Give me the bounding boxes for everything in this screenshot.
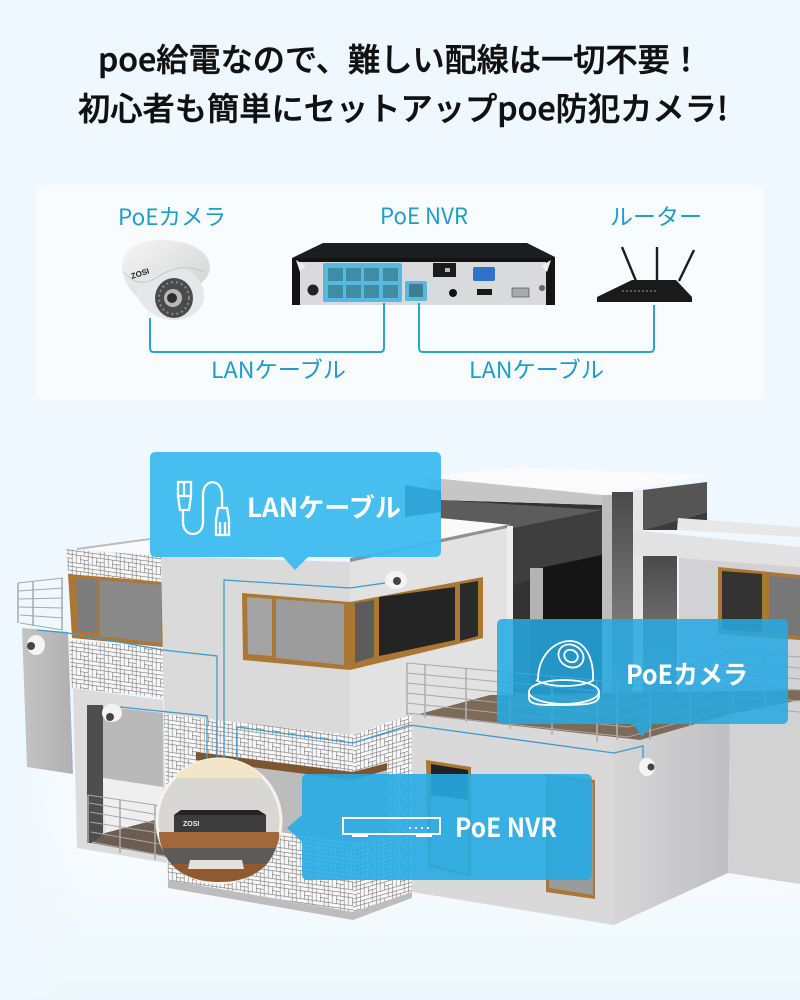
brick base [164, 714, 353, 912]
cable: camera to NVR [150, 303, 384, 352]
callout: LAN cable [150, 452, 441, 570]
centre block [161, 556, 350, 742]
icon: NVR box [343, 818, 440, 836]
house illustration [18, 467, 800, 925]
panel: wiring diagram [36, 185, 764, 401]
icon: dome camera photo [122, 240, 210, 320]
railings [18, 578, 800, 860]
label: PoEカメラ [626, 655, 748, 692]
icon: router [597, 247, 694, 302]
deck [412, 690, 800, 742]
title [78, 35, 728, 130]
roof plate [77, 518, 512, 558]
title: 初心者も簡単にセットアップpoe防犯カメラ! [78, 84, 728, 130]
cable: NVR to router [419, 303, 654, 352]
left wing [22, 628, 73, 774]
label: LAN cable left: LANケーブル [211, 353, 346, 385]
icon: dome camera [529, 640, 599, 705]
title: poe給電なので、難しい配線は一切不要！ [98, 35, 702, 81]
label: PoE camera: PoEカメラ [118, 200, 226, 232]
icon: NVR rear panel [292, 243, 555, 305]
lower right walls [412, 714, 640, 925]
upper storey [423, 467, 800, 720]
label: LAN cable right: LANケーブル [469, 353, 604, 385]
ground edge fade [0, 760, 90, 1000]
NVR magnifier circle [157, 759, 281, 883]
label: LANケーブル [247, 488, 401, 525]
label: PoE NVR [455, 808, 557, 845]
glass showing through callout [405, 485, 441, 517]
network cables [37, 580, 643, 765]
ground [24, 767, 800, 1000]
icon: wall cameras [27, 571, 655, 776]
NVR magnifier circle: ZOSI [183, 821, 199, 828]
windows [242, 577, 483, 670]
callout: PoE camera [497, 619, 788, 737]
icon: LAN cable [178, 482, 229, 535]
label: router: ルーター [610, 200, 702, 232]
icon: dome camera photo: ZOSI [130, 267, 150, 281]
label: PoE NVR: PoE NVR [380, 199, 468, 231]
callout: PoE NVR [287, 774, 592, 880]
